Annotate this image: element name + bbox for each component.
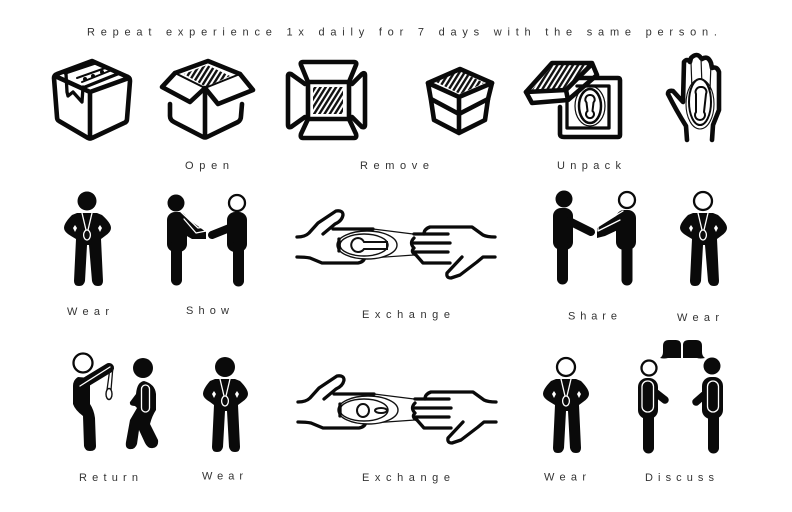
label: return: Return <box>79 472 138 484</box>
figure: two people discussing <box>638 340 723 448</box>
icon: speech bubbles <box>660 340 705 358</box>
label: share: Share <box>568 310 617 322</box>
label: discuss: Discuss <box>645 472 714 484</box>
figure: person wearing device, row 2 left <box>64 192 111 286</box>
icon: hands exchanging device <box>297 211 495 278</box>
label: remove: Remove <box>360 160 429 172</box>
figure: person wearing device, row 3 right <box>543 358 589 453</box>
icon: unpacked box with device <box>526 63 620 137</box>
label: open: Open <box>185 160 229 172</box>
label: wear: Wear <box>544 472 586 484</box>
label: exchange: Exchange <box>362 309 450 321</box>
figure: person wearing device, row 2 right <box>680 192 727 286</box>
icon: box opened from above <box>288 62 365 138</box>
label: exchange: Exchange <box>362 472 450 484</box>
icon: hands exchanging device back <box>298 376 496 443</box>
icon: closed box <box>54 61 130 138</box>
label: wear: Wear <box>202 470 243 482</box>
figure: two people sharing device <box>553 190 636 280</box>
label: show: Show <box>186 305 229 317</box>
icon: hand holding device <box>668 55 719 140</box>
icon: inner box <box>428 69 492 133</box>
figure: two people showing device <box>167 194 247 281</box>
label: wear: Wear <box>677 312 719 324</box>
figure: person wearing device, row 3 left <box>203 357 248 452</box>
title: Repeat experience 1x daily for 7 days with the same person. <box>87 26 717 38</box>
label: unpack: Unpack <box>557 160 622 172</box>
figure: person returning device to partner <box>73 354 158 451</box>
label: wear: Wear <box>67 306 109 318</box>
icon: open box <box>162 61 253 138</box>
